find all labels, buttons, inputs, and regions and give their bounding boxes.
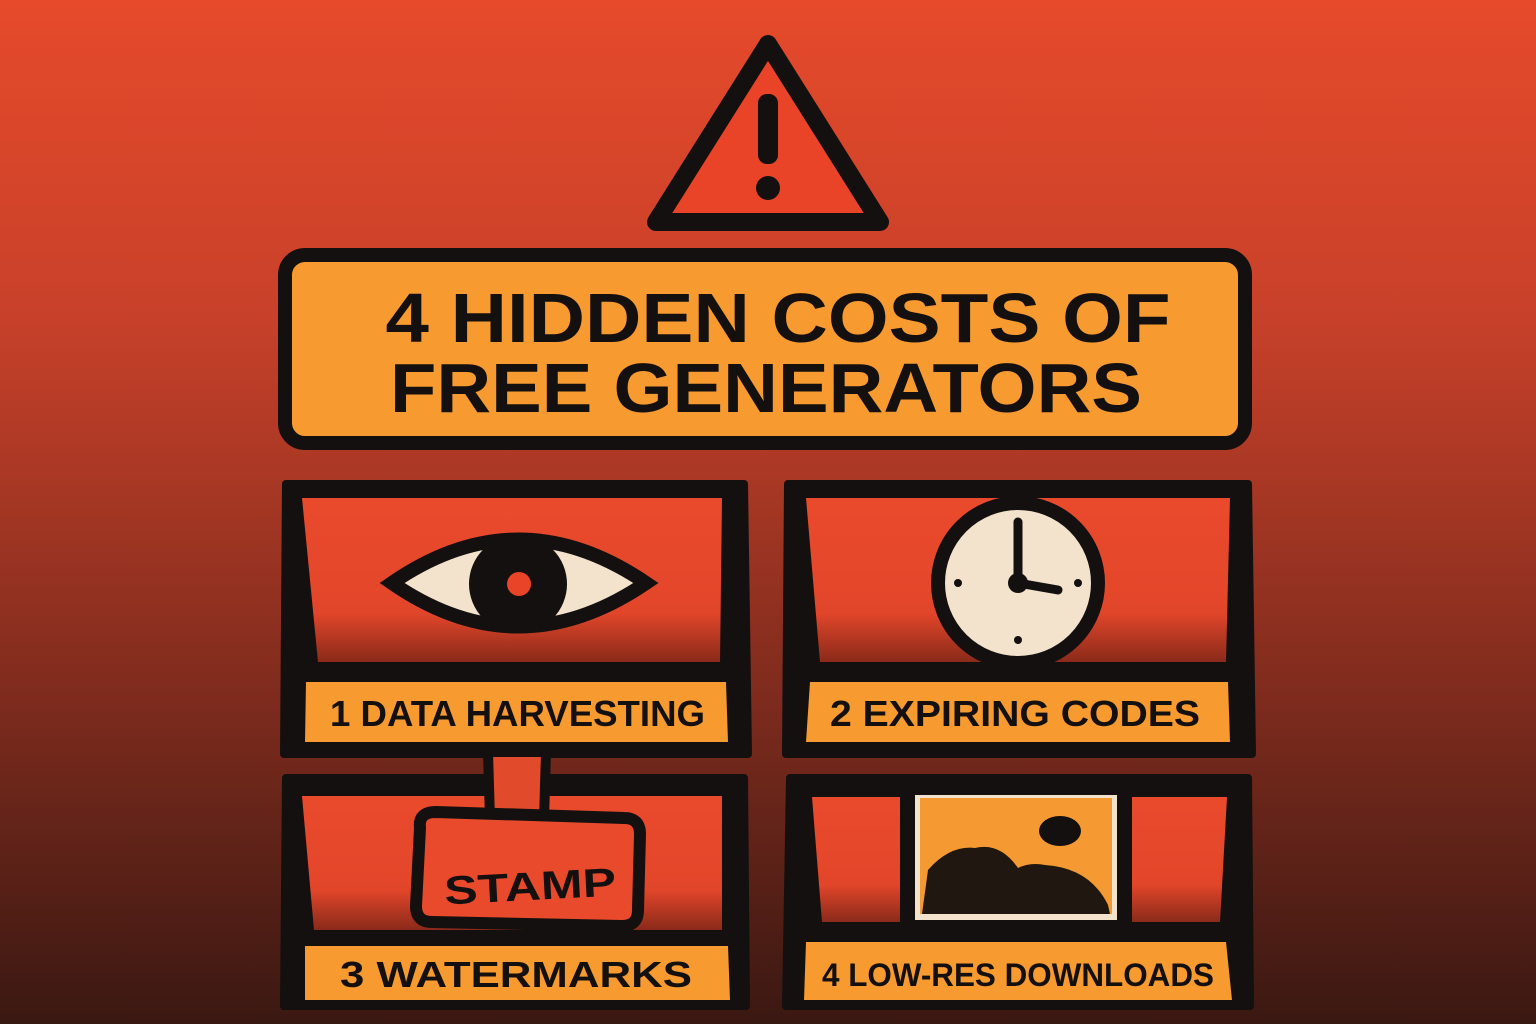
title: FREE GENERATORS [390,349,1142,427]
label: 1 data harvesting [305,682,728,742]
label: 4 low-res downloads [804,942,1232,1000]
label: 2 expiring codes [806,682,1230,742]
label: 4 low-res downloads: 4 LOW-RES DOWNLOADS [822,957,1214,993]
icon: clock [938,503,1098,663]
title [285,255,1245,443]
panel: data harvesting [284,484,748,754]
icon: stamp: STAMP [443,861,617,913]
icon: low-res image [915,795,1117,920]
panel: watermarks [284,752,746,1006]
icon: eye [392,535,646,633]
label: 1 data harvesting: 1 DATA HARVESTING [330,693,705,734]
panel: low-res downloads [786,778,1250,1006]
icon: stamp [416,752,640,926]
label: 2 expiring codes: 2 EXPIRING CODES [830,693,1200,734]
icon: warning triangle [656,44,880,222]
label: 3 watermarks: 3 WATERMARKS [340,954,692,995]
panel: expiring codes [786,484,1252,754]
label: 3 watermarks [305,946,730,1000]
title: 4 HIDDEN COSTS OF [386,279,1170,357]
